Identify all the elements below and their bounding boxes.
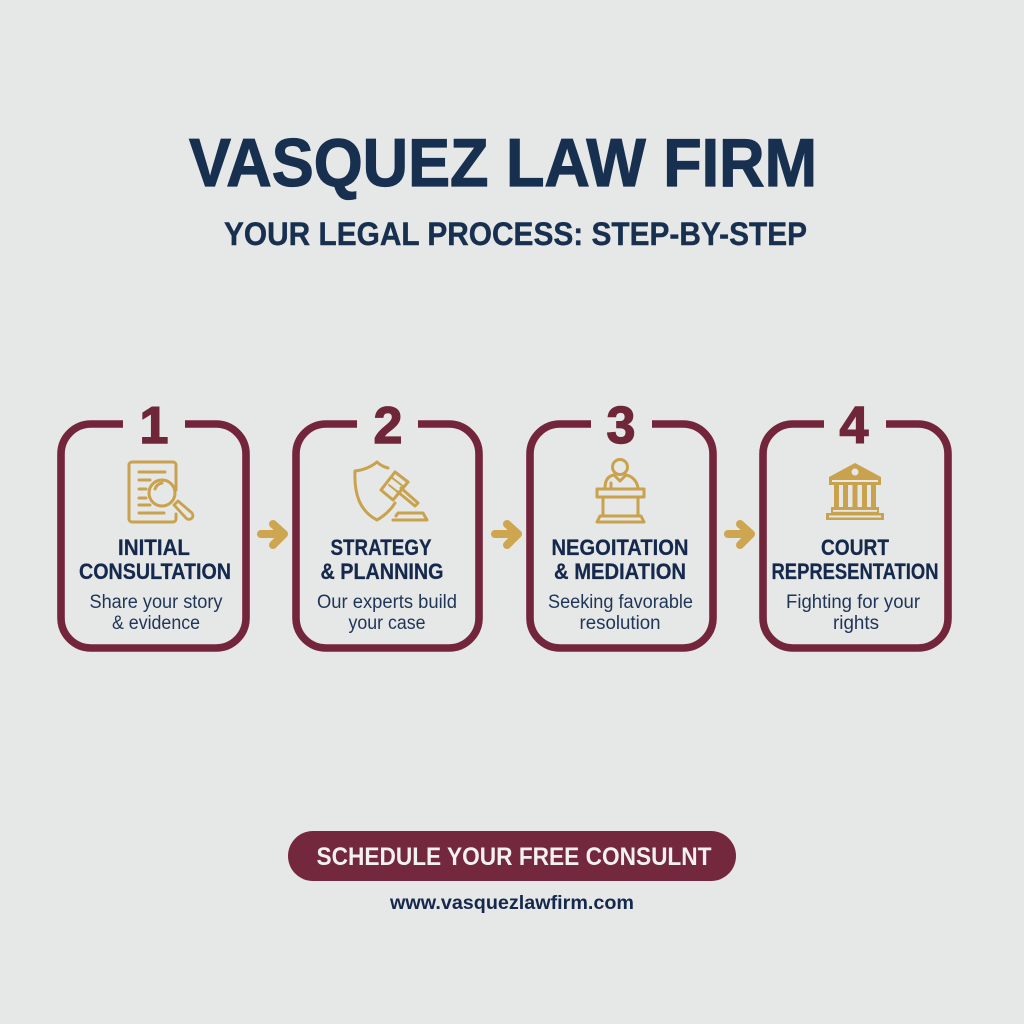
step 4 frame xyxy=(763,424,948,648)
step 3 heading xyxy=(552,535,688,584)
step 3 description: Seeking favorable xyxy=(548,592,693,613)
icon: speaker at podium xyxy=(597,460,644,522)
step 1 description xyxy=(90,592,223,634)
step 4 description xyxy=(786,592,921,634)
step 3 number: 3 xyxy=(607,397,635,455)
step 1 description: & evidence xyxy=(112,613,200,634)
call to action button: SCHEDULE YOUR FREE CONSULNT xyxy=(316,843,712,871)
step 3 frame xyxy=(530,424,713,648)
step 3 description xyxy=(548,592,693,634)
icon: courthouse xyxy=(826,463,884,520)
arrow 1 to 2 xyxy=(261,524,284,545)
icon: document with magnifier xyxy=(129,462,193,522)
arrow 3 to 4 xyxy=(728,524,751,545)
step 3 heading: & MEDIATION xyxy=(554,559,686,584)
step 2 number: 2 xyxy=(374,397,402,455)
step 4 description: rights xyxy=(833,613,879,634)
step 1 frame xyxy=(61,424,246,648)
step 1 heading xyxy=(79,535,231,584)
step 1 description: Share your story xyxy=(90,592,223,613)
call to action button xyxy=(288,831,736,881)
step 4 heading: COURT xyxy=(821,535,889,560)
title: VASQUEZ LAW FIRM xyxy=(189,125,817,201)
step 1 heading: INITIAL xyxy=(118,535,190,560)
step 2 heading xyxy=(320,535,444,584)
panel: step 1 initial consultation xyxy=(61,397,246,648)
step 1 heading: CONSULTATION xyxy=(79,559,231,584)
step 4 heading xyxy=(772,535,938,584)
icon: shield and gavel xyxy=(355,462,427,520)
step 2 description xyxy=(317,592,457,634)
step 3 description: resolution xyxy=(580,613,660,634)
step 4 number: 4 xyxy=(840,397,869,455)
panel: step 2 strategy and planning xyxy=(296,397,479,648)
panel: step 3 negotiation and mediation xyxy=(530,397,713,648)
website url: www.vasquezlawfirm.com xyxy=(389,893,634,914)
step 4 description: Fighting for your xyxy=(786,592,921,613)
step 2 frame xyxy=(296,424,479,648)
step 3 heading: NEGOITATION xyxy=(552,535,688,560)
step 4 heading: REPRESENTATION xyxy=(772,559,938,584)
step 2 heading: & PLANNING xyxy=(320,559,444,584)
step 1 number: 1 xyxy=(140,397,168,455)
panel: step 4 court representation xyxy=(763,397,948,648)
step 2 heading: STRATEGY xyxy=(330,535,432,560)
subtitle: YOUR LEGAL PROCESS: STEP-BY-STEP xyxy=(224,216,807,252)
step 2 description: Our experts build xyxy=(317,592,457,613)
arrow 2 to 3 xyxy=(495,524,518,545)
step 2 description: your case xyxy=(348,613,426,634)
